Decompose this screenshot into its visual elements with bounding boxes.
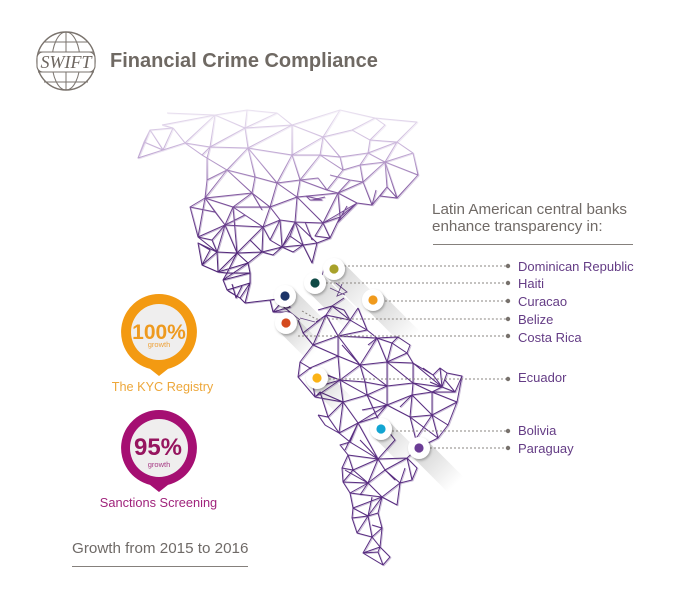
badge: Sanctions Screening 95% growth: growth bbox=[148, 460, 170, 469]
pin shadows bbox=[277, 261, 464, 493]
country labels: Dominican Republic bbox=[518, 259, 634, 274]
heading: central banks bbox=[432, 201, 633, 245]
logo: SWIFT globe bbox=[37, 32, 95, 90]
logo: SWIFT globe: SWIFT bbox=[40, 52, 93, 72]
pin: Ecuador bbox=[306, 367, 328, 389]
map: North America mesh bbox=[138, 110, 419, 313]
leader lines bbox=[298, 264, 510, 450]
pin: Curacao bbox=[362, 289, 384, 311]
country labels: Costa Rica bbox=[518, 330, 582, 345]
map: Caribbean islands mesh bbox=[290, 264, 347, 322]
badge: KYC Registry 100% growth: 100% bbox=[132, 321, 186, 344]
pin: Bolivia bbox=[370, 418, 392, 440]
badge: KYC Registry 100% growth: The KYC Registry bbox=[112, 380, 214, 394]
pin: Costa Rica bbox=[275, 312, 297, 334]
badge: Sanctions Screening 95% growth: 95% bbox=[134, 434, 182, 461]
badge: Sanctions Screening 95% growth bbox=[100, 410, 217, 510]
country labels: Bolivia bbox=[518, 423, 557, 438]
badge: KYC Registry 100% growth: growth bbox=[148, 340, 170, 349]
pin: Dominican Republic bbox=[323, 258, 345, 280]
country labels: Ecuador bbox=[518, 370, 567, 385]
pin: Paraguay bbox=[408, 437, 430, 459]
country labels: Belize bbox=[518, 312, 553, 327]
country labels: Paraguay bbox=[518, 441, 574, 456]
country labels bbox=[518, 259, 634, 456]
badge: Sanctions Screening 95% growth: Sanctions Screening bbox=[100, 495, 217, 510]
pin: Haiti bbox=[304, 272, 326, 294]
pin: Belize bbox=[274, 285, 296, 307]
caption: growth period: Growth from 2015 to 2016 bbox=[72, 540, 248, 557]
country labels: Curacao bbox=[518, 294, 567, 309]
heading: central banks: enhance transparency in: bbox=[432, 218, 603, 235]
country labels: Haiti bbox=[518, 276, 544, 291]
map: South America mesh bbox=[298, 298, 463, 566]
badge: KYC Registry 100% growth bbox=[112, 294, 214, 394]
title: Financial Crime Compliance bbox=[110, 50, 378, 72]
heading: central banks: Latin American central banks bbox=[432, 201, 627, 218]
